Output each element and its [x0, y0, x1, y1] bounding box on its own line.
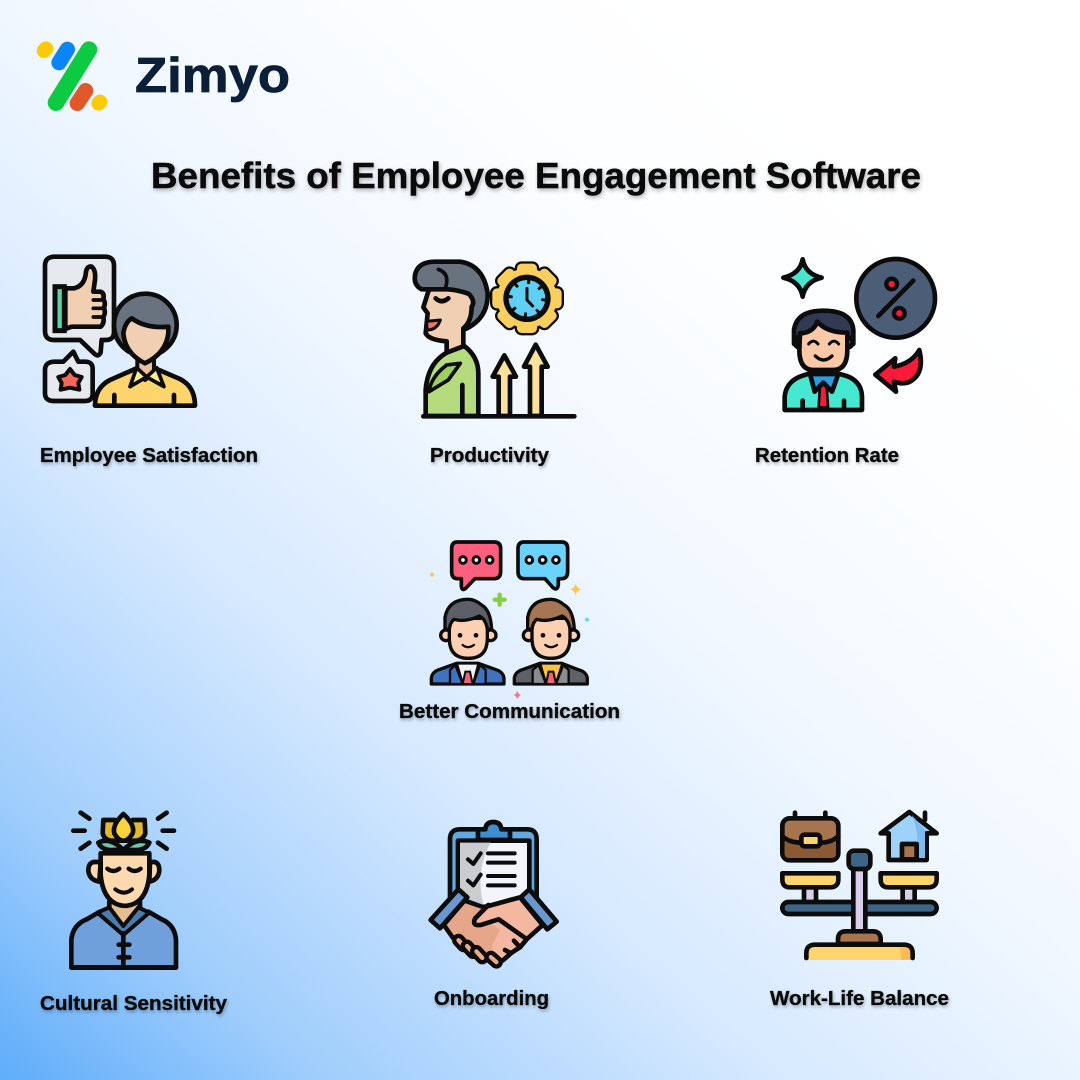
- panel: retention rate: [755, 259, 935, 467]
- label: Cultural Sensitivity: [40, 992, 228, 1015]
- panel: work-life balance: [770, 812, 949, 1010]
- label: Productivity: [430, 444, 550, 467]
- logo: Zimyo: [44, 49, 290, 103]
- icon: person, gear and growth arrows: [415, 262, 574, 416]
- label: Work-Life Balance: [770, 987, 949, 1010]
- panel: onboarding: [431, 822, 557, 1010]
- icon: two people talking: [430, 542, 589, 699]
- left person: [431, 599, 504, 684]
- label: Employee Satisfaction: [40, 444, 258, 467]
- logo wordmark: Zimyo: [135, 49, 290, 103]
- icon: balance scale with briefcase and house: [782, 812, 937, 960]
- label: Onboarding: [434, 987, 549, 1010]
- icon: thumbs up and person: [45, 257, 195, 406]
- right person: [514, 599, 587, 684]
- panel: better communication: [399, 542, 620, 723]
- icon: meditating person with lotus: [71, 813, 176, 968]
- label: Retention Rate: [755, 444, 899, 467]
- fingers: [452, 934, 503, 968]
- panel: productivity: [415, 262, 574, 467]
- title: Benefits of Employee Engagement Software: [151, 155, 921, 196]
- panel: cultural sensitivity: [40, 813, 228, 1015]
- icon: person, percent badge, star and arrow: [783, 259, 935, 410]
- handshake palms: [444, 897, 543, 964]
- label: Better Communication: [399, 700, 620, 723]
- icon: logo mark: [44, 49, 100, 103]
- panel: employee satisfaction: [40, 257, 258, 467]
- gear teeth: [492, 264, 562, 333]
- icon: clipboard and handshake: [431, 822, 557, 968]
